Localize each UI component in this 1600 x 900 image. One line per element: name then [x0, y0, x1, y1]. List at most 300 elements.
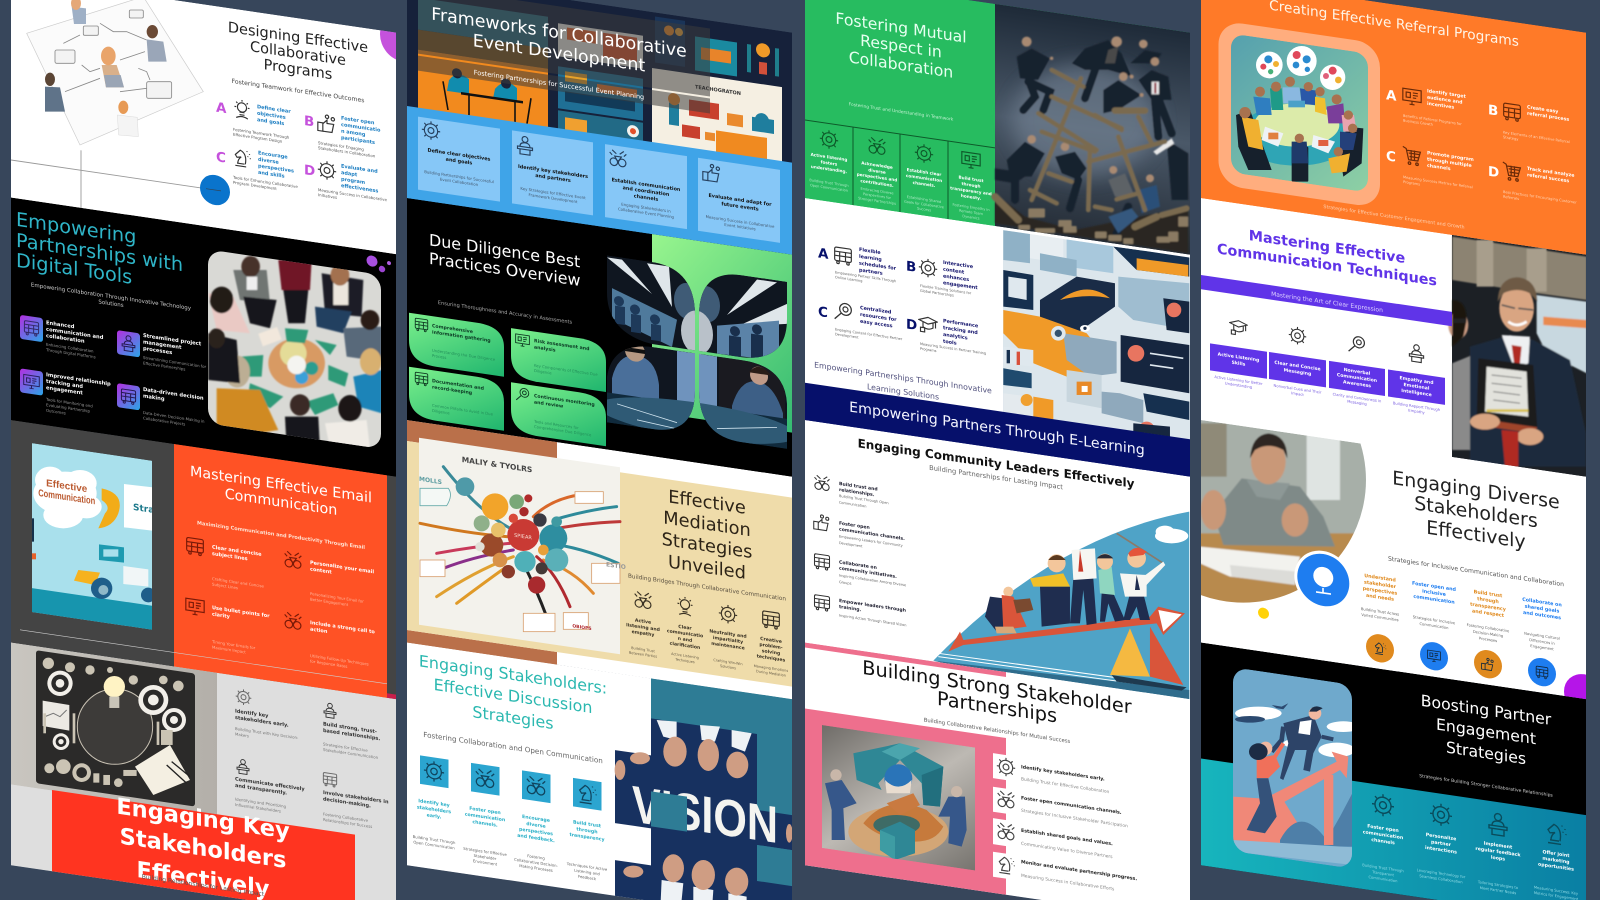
item C: Program Development: [233, 180, 277, 191]
column descriptions: Fostering Empathy in: [952, 203, 990, 212]
subtitle: Empowering Partnerships Through Innovative: [814, 360, 992, 395]
item descriptions: Programs: [1403, 180, 1420, 187]
item text: schedules for: [859, 261, 897, 272]
column descriptions: Differences in: [1529, 638, 1555, 646]
item descriptions: [839, 494, 906, 627]
yellow dot: [1258, 607, 1269, 619]
box labels: Active Listening: [1218, 352, 1259, 364]
purple corner circle: [1564, 671, 1600, 717]
item text: collaboration: [46, 333, 85, 345]
item text: tracking and: [943, 325, 978, 336]
card descriptions: Measuring Success in Collaborative: [706, 214, 774, 229]
item B: n among: [341, 129, 366, 138]
image: mind map: OBIOPS: [572, 623, 592, 632]
box labels: Nonverbal: [1344, 368, 1370, 377]
column icons: [1372, 793, 1566, 845]
item text: Create easy: [1527, 105, 1558, 115]
column titles: listening and: [626, 622, 660, 633]
column titles: Implement: [1484, 842, 1512, 851]
subtitle: Strategies for Inclusive Communication and Collaboration: [1388, 556, 1564, 588]
item text: decision-making.: [323, 796, 371, 809]
column titles: transparency: [569, 832, 605, 843]
title: Collaborative: [250, 38, 346, 69]
column descriptions: Remote Team: [959, 209, 983, 216]
image: e-learning collage: [1003, 203, 1190, 471]
item descriptions: Online Learning: [835, 275, 862, 283]
item descriptions: Building Trust for Effective Collaboration: [1021, 776, 1110, 795]
image: effective communication poster: Communication: [38, 488, 95, 507]
item text: [46, 320, 204, 402]
item descriptions: Flexible Training Solutions for: [920, 284, 971, 295]
item descriptions: Utilizing Follow-Up Techniques: [310, 653, 369, 667]
item B: Foster open: [341, 116, 375, 126]
VISION lettering: VISION: [632, 776, 778, 855]
orange-red panel: [174, 444, 387, 698]
column descriptions: Meet Partner Needs: [1480, 886, 1516, 895]
item text: Identify key: [235, 708, 268, 719]
item A: Fostering Teamwork Through: [233, 127, 289, 140]
card descriptions: Key Components of Effective Due: [534, 363, 598, 377]
image: effective communication poster: Effective: [46, 478, 88, 495]
beige panel: [407, 441, 792, 687]
column descriptions: Managing Emotions: [754, 664, 788, 673]
subtitle: Fostering Partnerships for Successful Event Planning: [474, 68, 644, 101]
title: Engagement: [1436, 715, 1536, 748]
item descriptions: Building Trust Through Open: [839, 494, 889, 505]
item text: [1021, 764, 1137, 882]
column titles: Build trust: [573, 820, 601, 830]
item letters: C: [818, 304, 828, 321]
column descriptions: Transparent: [1371, 870, 1394, 877]
title: Respect in: [860, 31, 942, 62]
column titles: Active listening: [811, 152, 847, 162]
column descriptions: Crafting Win-Win: [713, 658, 743, 666]
item text: relationships.: [839, 487, 875, 498]
item C: Encourage: [258, 150, 288, 161]
item letters: [1386, 87, 1499, 181]
card titles: Continuous monitoring: [534, 394, 595, 408]
item text: and transparently.: [235, 783, 287, 797]
column titles: through: [962, 181, 980, 189]
column titles: stakeholder: [1364, 579, 1397, 590]
title: Building Strong Stakeholder: [862, 656, 1132, 719]
slide: Due Diligence Best Practices Overview: [407, 198, 797, 478]
item descriptions: Data-Driven Decision-Making in: [143, 410, 204, 424]
item descriptions: Timing Your Emails for: [212, 639, 255, 650]
image: effective communication poster: [29, 443, 159, 631]
title: Mediation: [663, 507, 751, 541]
item descriptions: Outcomes: [46, 408, 66, 416]
photo: people on wooden scaffold: [995, 4, 1190, 282]
item text: subject lines: [212, 551, 248, 562]
item text: training.: [839, 604, 861, 613]
item C: C: [216, 149, 226, 167]
column descriptions: Engagement: [1530, 644, 1554, 652]
box labels: Awareness: [1343, 379, 1371, 389]
card icons: [422, 120, 720, 183]
item text: tools: [943, 339, 957, 347]
item icons: [997, 757, 1015, 875]
item text: Centralized: [860, 305, 891, 316]
item text: Communicate effectively: [235, 776, 305, 793]
title: Boosting Partner: [1421, 691, 1551, 729]
column titles: communicatio: [667, 628, 703, 640]
column titles: transparency and: [950, 185, 992, 196]
item descriptions: [211, 576, 369, 673]
card descriptions: [432, 348, 598, 438]
item descriptions: Relationships for Success: [323, 817, 372, 829]
item text: Enhanced: [46, 320, 74, 330]
item icons: [236, 688, 337, 788]
column titles: communication: [1363, 829, 1403, 841]
item icons: [814, 475, 830, 611]
slide: Engaging Diverse Stakeholders Effectively: [1193, 390, 1600, 717]
column descriptions: Between Parties: [629, 651, 657, 659]
item text: community initiatives.: [839, 566, 897, 580]
title: Strategies: [472, 702, 554, 733]
title: Effective: [668, 486, 746, 519]
column titles: interactions: [1425, 845, 1457, 856]
item descriptions: Makers: [235, 731, 249, 738]
column titles: impartiality: [713, 635, 743, 645]
subtitle: Strategies for Effective Customer Engagement and Growth: [1323, 204, 1465, 231]
subtitle: Fostering Teamwork for Effective Outcomes: [232, 78, 364, 104]
subtitle: Building Bridges Through Collaborative Communication: [628, 574, 786, 603]
item text: Use bullet points for: [212, 605, 270, 620]
leaf cards: [409, 313, 606, 446]
item descriptions: Enhancing Collaboration: [46, 342, 94, 354]
column titles: and needs: [1366, 593, 1394, 603]
item text: Collaborate on: [839, 561, 877, 571]
column titles: Build trust: [1474, 590, 1502, 599]
card descriptions: [424, 169, 775, 234]
item descriptions: for Response Rates: [310, 658, 347, 669]
item descriptions: Strategies for Inclusive Stakeholder Participation: [1021, 808, 1128, 829]
column titles: through: [1477, 596, 1499, 605]
column titles: Active: [635, 619, 651, 626]
item descriptions: Engaging Content for Effective Partner: [835, 327, 902, 341]
blue circle: [200, 173, 230, 207]
card descriptions: Understanding the Due Diligence: [432, 348, 495, 362]
column titles: Neutrality and: [709, 629, 747, 640]
blue lower band: [407, 106, 792, 256]
card icons: [415, 318, 529, 402]
pink accents: [805, 642, 1006, 895]
column titles: contributions.: [860, 178, 894, 188]
item icons: [186, 536, 301, 630]
teal lower band: [1201, 758, 1586, 900]
slide: Designing Effective Collaborative Programs: [11, 0, 426, 260]
item text: Performance: [943, 318, 978, 329]
item text: Foster open: [839, 522, 870, 531]
column titles: Encourage: [522, 815, 550, 824]
title: Programs: [264, 56, 332, 83]
item text: tracking and: [46, 379, 83, 390]
item descriptions: Measuring Success in Collaborative Efforts: [1021, 873, 1115, 893]
column descriptions: Stronger Partnerships: [858, 196, 896, 206]
card descriptions: Process: [432, 353, 446, 360]
column titles: Understand: [1364, 574, 1396, 584]
tile icons: [424, 760, 596, 805]
column titles: perspectives and: [857, 172, 897, 183]
item A: objectives: [257, 111, 286, 121]
title: Stakeholders: [120, 824, 286, 874]
item text: Promote program: [1427, 151, 1474, 163]
item C: perspectives: [258, 163, 294, 175]
item letters: A: [818, 245, 829, 263]
item text: Build strong, trust-: [323, 721, 377, 735]
image: mind map: MALIY & TYOLRS: [462, 455, 532, 474]
column titles: through: [576, 826, 598, 836]
item text: Monitor and evaluate partnership progress.: [1021, 859, 1137, 882]
column descriptions: Establishing Shared: [907, 195, 941, 204]
image: dark board with targets: [11, 631, 217, 821]
item text: content: [943, 267, 965, 276]
item descriptions: Maximum Impact: [212, 645, 246, 655]
column titles: honesty.: [961, 193, 981, 201]
item descriptions: Stakeholder Communication: [323, 747, 379, 760]
item C: [216, 150, 298, 190]
title: Practices Overview: [429, 249, 581, 290]
column titles: communication: [465, 812, 505, 823]
column titles: Foster open: [469, 807, 501, 816]
column titles: partner: [1431, 839, 1452, 848]
column titles: [1363, 573, 1562, 628]
column descriptions: Embracing Diverse: [860, 187, 894, 196]
column titles: maintenance: [711, 641, 745, 652]
item descriptions: Influential Stakeholders: [235, 802, 281, 814]
item descriptions: Development: [839, 541, 863, 549]
title: Event Development: [473, 31, 645, 77]
item descriptions: Strategies for Effective: [323, 741, 368, 753]
box labels: Communication: [1337, 372, 1377, 384]
item descriptions: Communicating Value to Diverse Partners: [1021, 841, 1113, 860]
column titles: communication: [1413, 594, 1455, 606]
image: clover shaped photo: [597, 246, 797, 455]
red title band: [52, 790, 355, 900]
item text: stakeholders early.: [235, 715, 289, 729]
item D: D: [304, 162, 315, 180]
slide: Building Strong Stakeholder Partnerships: [805, 642, 1190, 900]
card titles: Documentation and: [432, 379, 484, 392]
title: Effectively: [1426, 516, 1526, 553]
subtitle: Fostering Trust and Understanding in Teamwork: [849, 101, 954, 123]
title: Frameworks for Collaborative: [431, 5, 687, 62]
item D: Initiatives: [318, 192, 337, 200]
column titles: Collaborate on: [1522, 598, 1562, 609]
globe badge: [1294, 547, 1352, 613]
item descriptions: Through Digital Platforms: [45, 347, 96, 359]
subtitle: Building Relationships for Lasting Impact: [142, 873, 265, 898]
image: flat illustration collage: [418, 0, 782, 163]
banner title: Empowering Partners Through E-Learning: [849, 400, 1145, 459]
column titles: Creative: [760, 637, 782, 645]
column titles: Build trust: [958, 175, 984, 183]
column descriptions: [809, 178, 990, 222]
column descriptions: Leveraging Technology for: [1417, 868, 1465, 879]
item A: and goals: [257, 117, 284, 127]
card titles: and coordination: [623, 185, 670, 198]
slide: Fostering Mutual Respect in Collaboration: [805, 0, 1190, 282]
column icons: [1230, 317, 1424, 363]
card titles: Define clear objectives: [428, 148, 490, 163]
item descriptions: Best Practices for Encouraging Customer: [1503, 190, 1577, 205]
card titles: [428, 148, 772, 220]
item text: [235, 708, 389, 812]
item text: Personalize your email: [310, 560, 374, 575]
item descriptions: [235, 726, 379, 830]
subtitle: Building Partnerships for Lasting Impact: [929, 464, 1063, 491]
item text: referral success: [1527, 172, 1569, 184]
card titles: record-keeping: [432, 384, 472, 396]
slide: Mastering Effective Email Communication: [11, 420, 396, 700]
item icons: [1403, 88, 1520, 182]
column descriptions: Collaborative Decision-: [514, 857, 559, 868]
photo: vision fists: [615, 694, 793, 900]
title: Due Diligence Best: [429, 230, 580, 271]
card descriptions: Tools and Resources for: [534, 419, 579, 430]
box descriptions: Nonverbal Cues and Their: [1274, 384, 1321, 395]
title: Effective Discussion: [434, 675, 592, 717]
item text: through multiple: [1427, 157, 1472, 169]
card descriptions: Diligence: [432, 408, 450, 416]
card descriptions: Building Partnerships for Successful: [424, 169, 494, 184]
item descriptions: Communication: [839, 501, 866, 509]
image: effective communication poster: Strat: [133, 503, 159, 517]
card titles: Risk assessment and: [534, 339, 589, 352]
subtitle: Solutions: [98, 299, 124, 309]
column descriptions: Navigating Cultural: [1524, 632, 1560, 641]
item letters: B: [1488, 102, 1498, 120]
column descriptions: Seamless Collaboration: [1419, 874, 1463, 885]
card descriptions: Collaborative Event Planning: [618, 206, 675, 220]
item descriptions: Fostering Collaborative: [323, 811, 368, 823]
title: Mastering Effective Email: [190, 464, 372, 507]
item D: Evaluate and: [341, 164, 378, 175]
item letters: [818, 245, 917, 334]
image: team around round table: [1231, 27, 1368, 201]
item text: Involve stakeholders in: [323, 790, 389, 805]
column descriptions: Open Communication: [810, 183, 848, 193]
column titles: perspectives: [519, 826, 553, 837]
card titles: Evaluate and adapt for: [708, 193, 772, 208]
item descriptions: [1403, 114, 1577, 210]
card descriptions: Event Collaboration: [440, 177, 479, 187]
item text: communication and: [46, 327, 104, 341]
box descriptions: Clarity and Conciseness in: [1333, 392, 1381, 404]
title: Unveiled: [668, 552, 746, 584]
title: Stakeholders: [1414, 491, 1538, 532]
image: team on arrow with sailboat: [933, 512, 1189, 700]
item text: [859, 247, 979, 350]
column descriptions: Building Trust Through: [413, 834, 455, 845]
title: Engaging Key: [116, 794, 290, 845]
image: climbing an arrow together: [1233, 667, 1360, 884]
slide: Frameworks for Collaborative Event Development: TEACHOGRATON: [695, 84, 741, 97]
item letters: B: [906, 258, 916, 276]
green panel: [652, 234, 792, 433]
item descriptions: Subject Lines: [212, 582, 238, 590]
item descriptions: Effective Partnerships: [143, 360, 185, 372]
item text: partners: [859, 267, 883, 277]
image: businessmen with blocks: [822, 722, 975, 882]
item text: enhances: [943, 273, 969, 283]
column descriptions: Success: [917, 206, 931, 213]
item descriptions: [1021, 776, 1128, 894]
title overlay bands: [418, 0, 710, 114]
slide: Engaging Stakeholders: Effective Discussion Strategies: [407, 642, 793, 900]
column descriptions: Decision-Making: [1473, 630, 1504, 638]
item text: [212, 545, 375, 642]
item text: Clear and concise: [212, 545, 262, 558]
title: Strategies: [662, 529, 752, 563]
column icon badges: [1366, 632, 1556, 688]
item C: and skills: [258, 170, 285, 180]
card descriptions: Diligence: [534, 368, 552, 376]
box descriptions: Messaging: [1347, 400, 1367, 406]
item text: engagement: [46, 385, 83, 397]
card descriptions: Common Pitfalls to Avoid in Due: [432, 403, 493, 417]
column titles: channels.: [472, 819, 498, 829]
title: Fostering Mutual: [835, 9, 967, 47]
card titles: and goals: [446, 157, 472, 167]
column descriptions: Active Listening: [671, 652, 699, 660]
card titles: and partners: [535, 173, 571, 184]
column titles: perspectives: [1363, 586, 1397, 597]
item text: based relationships.: [323, 728, 380, 742]
title: Designing Effective: [228, 19, 368, 56]
card descriptions: Engaging Stakeholders in: [621, 202, 671, 214]
column titles: empathy: [632, 629, 654, 638]
subtitle: Maximizing Communication and Productivity Through Email: [197, 520, 365, 551]
column descriptions: Communication: [1368, 875, 1398, 883]
item text: referral process: [1527, 111, 1569, 123]
photo: man with framed award: [1448, 216, 1587, 487]
item descriptions: [835, 270, 986, 360]
column descriptions: Fostering Collaborative: [1467, 623, 1509, 633]
purple band: [1201, 275, 1452, 326]
item text: resources for: [860, 312, 897, 323]
decorative purple dots: [366, 255, 391, 274]
column descriptions: Strategies for Inclusive: [1413, 615, 1455, 625]
grid lines: [805, 120, 995, 227]
title: Engaging Stakeholders:: [419, 651, 607, 698]
card descriptions: Key Strategies for Effective Event: [520, 186, 586, 200]
item descriptions: Empowering Leaders for Community: [839, 535, 903, 548]
item descriptions: Crafting Clear and Concise: [212, 576, 264, 589]
image: mind map: ESTIO: [606, 561, 626, 571]
title: Empowering: [16, 208, 136, 248]
column titles: early.: [427, 812, 442, 821]
item descriptions: Strategy: [1503, 135, 1519, 142]
slide: Effective Mediation Strategies Unveiled: [407, 420, 792, 700]
card titles: channels: [634, 193, 658, 203]
item text: Include a strong call to: [310, 620, 375, 635]
card descriptions: Framework Development: [529, 192, 578, 204]
item B: Strategies for Engaging: [318, 140, 364, 152]
column 4: [1193, 0, 1600, 900]
item text: making: [143, 393, 165, 403]
subtitle: Strategies for Building Stronger Collaborative Relationships: [1419, 773, 1553, 799]
item D: Measuring Success in Collaborative: [318, 187, 387, 202]
item descriptions: Measuring Success Metrics for Referral: [1403, 175, 1473, 189]
item descriptions: Measuring Success in Partner Training: [920, 342, 986, 356]
column descriptions: Listening and: [574, 868, 600, 876]
column descriptions: Open Communication: [413, 839, 455, 851]
column descriptions: Building Trust: [631, 646, 655, 653]
column titles: stakeholders: [417, 804, 451, 815]
column titles: communication: [906, 173, 942, 183]
